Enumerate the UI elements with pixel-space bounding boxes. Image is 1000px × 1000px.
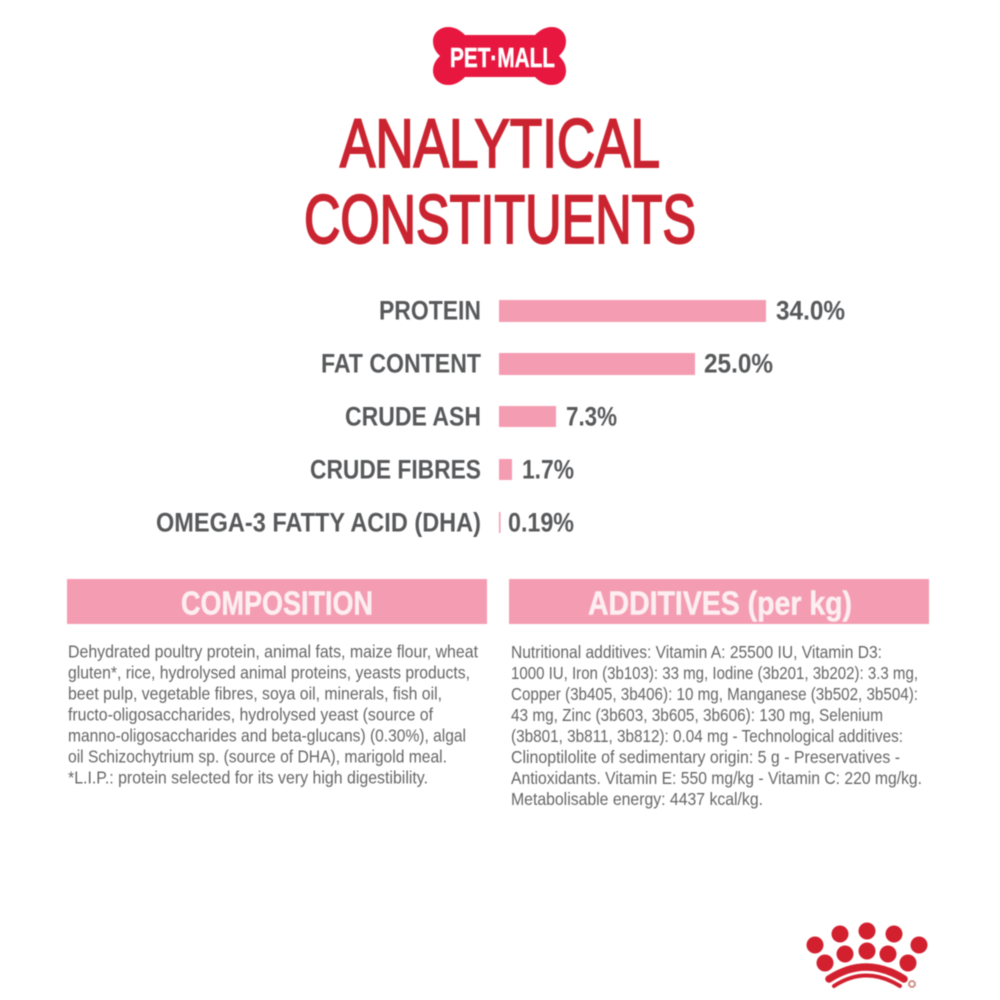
panel: composition bbox=[67, 579, 487, 788]
additives text: 1000 IU, Iron (3b103): 33 mg, Iodine (3b201, 3b202): 3.3 mg, bbox=[511, 663, 918, 683]
composition text: oil Schizochytrium sp. (source of DHA), marigold meal. bbox=[68, 746, 447, 766]
bar row: crude ash bbox=[345, 402, 617, 432]
additives text: 43 mg, Zinc (3b603, 3b605, 3b606): 130 mg, Selenium bbox=[511, 705, 883, 725]
bar row: omega-3: 0.19% bbox=[508, 508, 574, 538]
title: ANALYTICAL bbox=[340, 105, 660, 182]
bar row: fat content: 25.0% bbox=[704, 348, 773, 378]
icon: Royal Canin crown bbox=[806, 922, 928, 987]
bar row: protein: 34.0% bbox=[776, 296, 845, 326]
bar row: crude ash: 7.3% bbox=[566, 402, 617, 432]
title bbox=[304, 105, 696, 258]
composition text: fructo-oligosaccharides, hydrolysed yeast (source of bbox=[68, 704, 433, 724]
additives text: Metabolisable energy: 4437 kcal/kg. bbox=[511, 789, 763, 809]
composition text: Dehydrated poultry protein, animal fats, maize flour, wheat bbox=[68, 642, 478, 662]
composition text: *L.I.P.: protein selected for its very high digestibility. bbox=[68, 768, 428, 788]
logo: Pet-Mall bone bbox=[433, 27, 566, 85]
bar row: crude ash: CRUDE ASH bbox=[345, 402, 481, 432]
bar chart: analytical constituents bbox=[156, 296, 845, 538]
additives header bbox=[509, 579, 929, 624]
composition text bbox=[68, 642, 478, 788]
composition header bbox=[67, 579, 487, 624]
bar row: crude fibres: CRUDE FIBRES bbox=[310, 454, 481, 484]
additives text: Clinoptilolite of sedimentary origin: 5 g - Preservatives - bbox=[511, 747, 900, 767]
additives text: (3b801, 3b811, 3b812): 0.04 mg - Technological additives: bbox=[511, 726, 903, 746]
bar row: omega-3: OMEGA-3 FATTY ACID (DHA) bbox=[156, 508, 481, 538]
additives text: Copper (3b405, 3b406): 10 mg, Manganese (3b502, 3b504): bbox=[511, 684, 918, 704]
bar row: protein: PROTEIN bbox=[379, 296, 481, 326]
additives header: ADDITIVES (per kg) bbox=[588, 584, 852, 622]
additives text: Nutritional additives: Vitamin A: 25500 IU, Vitamin D3: bbox=[511, 642, 882, 662]
composition header: COMPOSITION bbox=[181, 584, 373, 622]
composition text: beet pulp, vegetable fibres, soya oil, minerals, fish oil, bbox=[68, 684, 442, 704]
logo: Pet-Mall bone: PET·MALL bbox=[450, 42, 555, 73]
additives text bbox=[511, 642, 922, 809]
bar row: crude fibres: 1.7% bbox=[522, 454, 574, 484]
composition text: manno-oligosaccharides and beta-glucans) (0.30%), algal bbox=[68, 726, 466, 746]
additives text: Antioxidants. Vitamin E: 550 mg/kg - Vitamin C: 220 mg/kg. bbox=[511, 768, 922, 788]
title: CONSTITUENTS bbox=[304, 181, 696, 258]
bar row: protein bbox=[379, 296, 845, 326]
bar row: fat content bbox=[321, 348, 773, 378]
bar row: fat content: FAT CONTENT bbox=[321, 348, 481, 378]
panel: additives bbox=[509, 579, 929, 809]
composition text: gluten*, rice, hydrolysed animal proteins, yeasts products, bbox=[68, 662, 470, 682]
